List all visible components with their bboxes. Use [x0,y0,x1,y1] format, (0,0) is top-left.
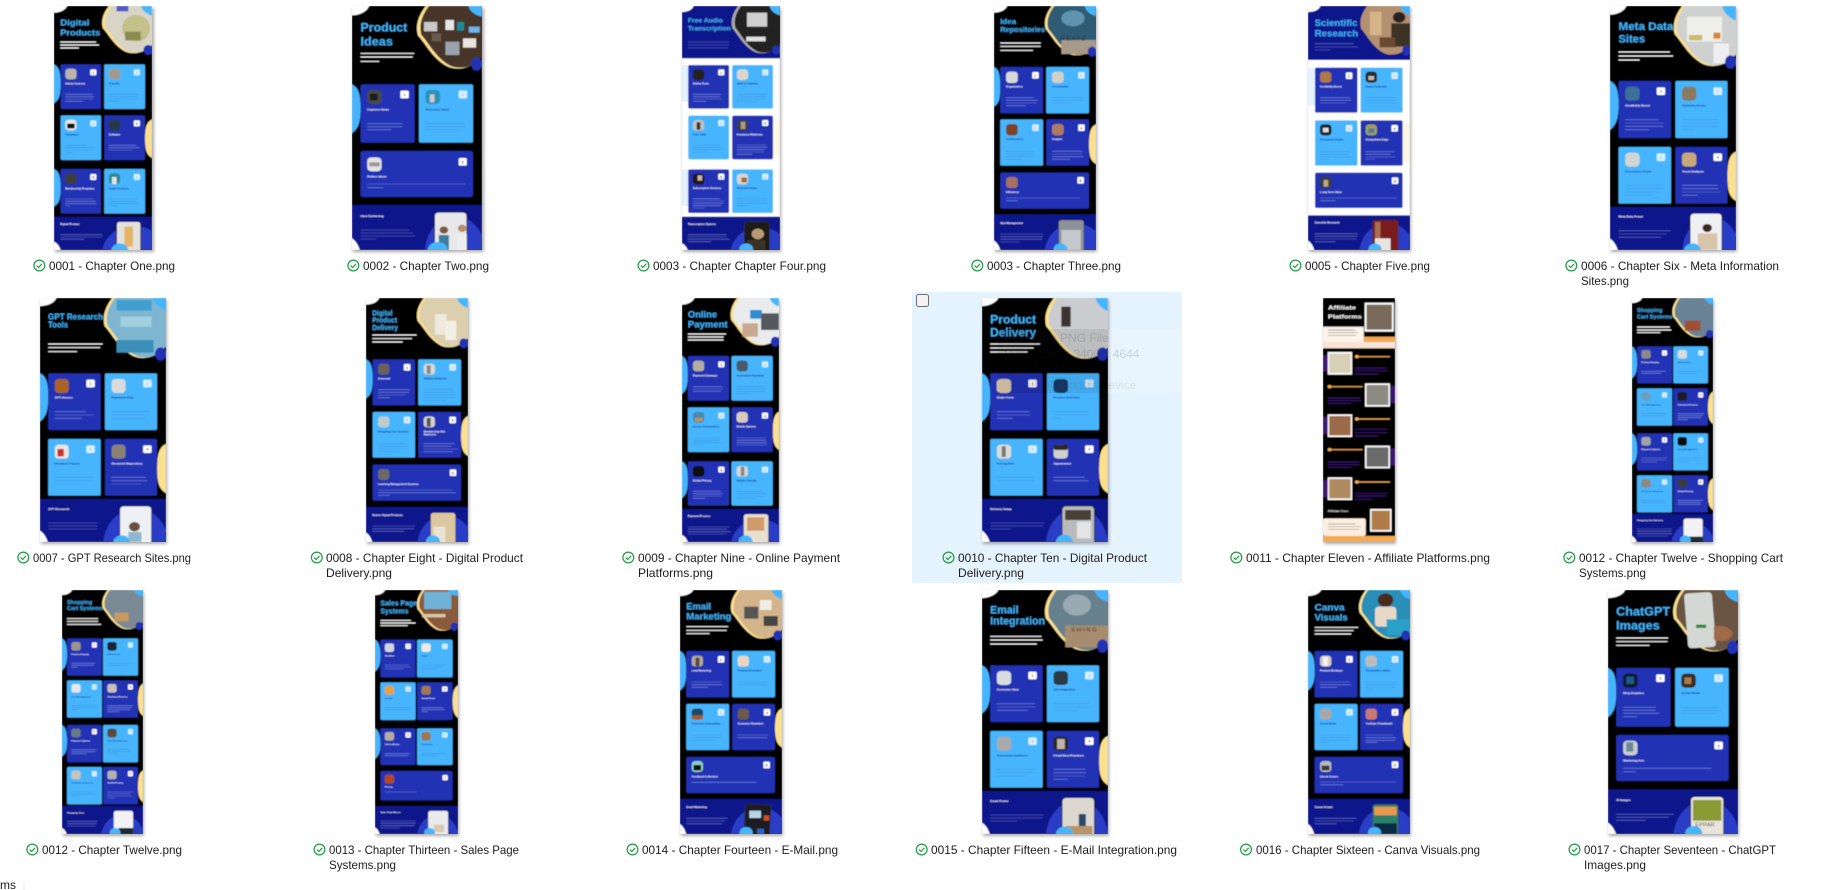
thumbnail: 0001 Digital Products: Digital [60,17,89,28]
thumbnail: 0010 Product Delivery: Product Selection [1054,396,1080,400]
thumbnail: 0010 Product Delivery: 4 [1088,448,1090,452]
status bar item count [0,878,24,890]
thumbnail: 0014 Email Marketing: Customer Retention [738,723,764,726]
thumbnail: 0001 Digital Products [54,6,152,250]
thumbnail: 0013 Sales Page Systems: Pricing [385,787,393,789]
thumbnail: 0003 Idea Repositories [994,6,1096,250]
thumbnail: 0009 Online Payment [682,298,779,542]
thumbnail: 0001 Digital Products: Digital Product [60,223,80,226]
thumbnail: 0001 Digital Products: Membership Programs [65,187,95,190]
thumbnail: 0009 Online Payment: Mobile Options [737,426,757,429]
thumbnail: 0013 Sales Page Systems: 5 [407,733,409,737]
thumbnail: 0014 Email Marketing: Product Promotion [738,670,763,673]
thumbnail: 0003 Free Audio Transcription: 1 [720,71,722,75]
thumbnail: 0016 Canva Visuals: Presentation Slides [1366,670,1391,673]
thumbnail: 0003 Free Audio Transcription: 3 [720,122,722,126]
thumbnail: 0010 Product Delivery: Pricing Plan [997,462,1015,465]
caption: 0006 [1566,259,1779,288]
thumbnail: 0003 Idea Repositories: 5 [1079,179,1082,183]
thumbnail: 0008 Digital Product Delivery: Affiliate Platforms [424,378,447,381]
thumbnail: 0002 Product Ideas: Idea Gathering [361,214,384,218]
thumbnail: 0008 Digital Product Delivery: 5 [452,472,454,475]
thumbnail: 0007 GPT Research Tools [40,298,166,542]
thumbnail: 0003 Idea Repositories: 2 [1080,74,1082,78]
thumbnail: 0001 Digital Products: Online Courses [65,83,86,86]
thumbnail: 0005 Scientific Research: Research [1315,29,1358,39]
thumbnail: 0014 Email Marketing: Lead Nurturing [692,670,712,673]
thumbnail: 0012 Shopping Cart Systems [1632,298,1713,542]
thumbnail: 0015 Email Integration: 2 [1088,674,1090,678]
thumbnail: 0012 Shopping Cart Systems: 7 [1663,480,1666,484]
caption: 0015: 0015 - Chapter Fifteen - E-Mail Integration.png [931,843,1177,857]
thumbnail: 0012 Shopping Cart Systems: 2 [1700,351,1702,355]
thumbnail: 0012 Shopping Cart Systems: 1 [1663,351,1666,355]
thumbnail: 0012 Chapter Twelve: Checkout Process [107,696,128,699]
thumbnail: 0016 Canva Visuals: Product Mockups [1320,670,1343,673]
thumbnail: 0014 Email Marketing: 5 [765,764,768,768]
caption: 0003 Chapter Four: 0003 - Chapter Chapter Four.png [653,259,826,273]
caption: 0003 Chapter Three: 0003 - Chapter Three.png [987,259,1121,273]
thumbnail: 0013 Sales Page Systems: Sales Page [380,599,418,607]
thumbnail: 0003 Free Audio Transcription: Online Tools [693,83,710,86]
thumbnail: 0017 ChatGPT Images [1608,590,1738,834]
thumbnail: 0012 Shopping Cart Systems: Shopping Cart Systems [1637,519,1664,522]
thumbnail: 0009 Online Payment: Payment Gateways [693,374,718,377]
thumbnail: 0014 Email Marketing [680,590,782,834]
thumbnail: 0013 Sales Page Systems: Headline [385,655,395,657]
thumbnail: 0011 Affiliate Platforms: Platforms [1328,315,1362,320]
thumbnail: 0009 Online Payment: Payment Process [688,515,711,518]
thumbnail: 0006 Meta Data Sites: Credibility Boost [1625,104,1650,108]
thumbnail: 0002 Product Ideas: Ideas [361,34,393,48]
thumbnail: 0007 GPT Research Tools: Statistical Data [112,396,134,400]
thumbnail: 0002 Product Ideas: 2 [462,93,464,97]
thumbnail: 0012 Shopping Cart Systems: Payment Options [1641,448,1661,451]
thumbnail: 0012 Shopping Cart Systems: User Management [1678,448,1698,451]
thumbnail: 0012 Chapter Twelve: 3 [93,685,95,689]
thumbnail: 0002 Product Ideas: Capture Ideas [367,108,389,111]
thumbnail: 0001 Digital Products: 1 [92,71,94,75]
caption: 0001: 0001 - Chapter One.png [49,259,175,273]
thumbnail: 0012 Chapter Twelve [62,590,143,834]
thumbnail: 0003 Idea Repositories: Efficiency [1006,191,1019,194]
thumbnail: 0003 Free Audio Transcription [682,6,780,250]
thumbnail: 0012 Shopping Cart Systems: Cart Systems [1637,315,1672,320]
thumbnail: 0017 ChatGPT Images: Marketing Ads [1623,759,1645,762]
thumbnail: 0016 Canva Visuals: 5 [1394,764,1396,767]
thumbnail: 0001 Digital Products: 6 [136,176,138,180]
caption: 0017: Images.png [1584,858,1646,872]
thumbnail: 0010 Product Delivery: Product [990,312,1037,326]
thumbnail: 0008 Digital Product Delivery: Learning Management Systems [378,483,419,486]
thumbnail: 0012 Chapter Twelve: Cart Systems [67,606,102,612]
thumbnail: 0006 Meta Data Sites: Meta Data Power [1619,215,1644,219]
thumbnail: 0012 Chapter Twelve: Customer Accounts [71,782,94,785]
thumbnail: 0012 Chapter Twelve: 6 [129,730,131,734]
thumbnail: 0006 Meta Data Sites: Trend Analysis [1682,170,1704,174]
thumbnail: 0013 Sales Page Systems: Social Proof [421,698,435,700]
thumbnail: 0006 Meta Data Sites: Persuasive Power [1625,170,1653,174]
thumbnail: 0005 Scientific Research [1308,6,1410,250]
thumbnail: 0003 Idea Repositories: Idea [1000,18,1017,26]
thumbnail: 0008 Digital Product Delivery: 4 [451,419,454,423]
caption: 0012 Chapter Twelve: 0012 - Chapter Twelve.png [42,843,182,857]
thumbnail: 0009 Online Payment: 3 [720,415,722,418]
thumbnail: 0002 Product Ideas: Product [361,21,408,34]
thumbnail: 0013 Sales Page Systems: 6 [444,733,446,737]
thumbnail: 0014 Email Marketing: Email Marketing [686,806,707,809]
thumbnail: 0013 Sales Page Systems: 2 [444,645,446,648]
thumbnail: 0012 Chapter Twelve: Product Display [71,653,90,656]
thumbnail: 0003 Free Audio Transcription: Transcription [688,24,731,33]
thumbnail: 0016 Canva Visuals: 4 [1394,711,1396,715]
thumbnail: 0008 Digital Product Delivery: Gumroad [378,378,391,381]
caption: 0016: 0016 - Chapter Sixteen - Canva Visuals.png [1256,843,1480,857]
ghost tooltip fading over 0010: Size: 1.62 MB [1004,362,1079,376]
thumbnail: 0009 Online Payment: 1 [720,363,722,367]
thumbnail: 0005 Scientific Research: Scientific Research [1315,222,1340,225]
caption: 0009 [623,551,841,580]
thumbnail: 0008 Digital Product Delivery: 2 [451,366,454,370]
ghost tooltip fading over 0010: Dimensions: 3400 x 4644 [1004,347,1140,361]
thumbnail: 0012 Shopping Cart Systems: Checkout Process [1678,404,1699,407]
thumbnail: 0005 Scientific Research: 2 [1393,75,1396,78]
thumbnail: 0010 Product Delivery [982,298,1108,542]
thumbnail: 0014 Email Marketing: 3 [720,711,722,715]
thumbnail: 0001 Digital Products: 3 [92,122,94,126]
thumbnail: 0012 Shopping Cart Systems: Add-to-Cart [1678,361,1691,364]
thumbnail: 0017 ChatGPT Images: 1 [1659,677,1661,681]
thumbnail: 0006 Meta Data Sites [1610,6,1736,250]
thumbnail: 0008 Digital Product Delivery: Digital [372,309,392,317]
caption: 0009: 0009 - Chapter Nine - Online Payment [638,551,841,565]
thumbnail: 0014 Email Marketing: Marketing [686,612,731,622]
thumbnail: 0013 Sales Page Systems: Visuals [385,698,394,700]
thumbnail: 0017 ChatGPT Images: Social Media [1681,691,1700,695]
thumbnail: 0003 Free Audio Transcription: 6 [764,176,766,179]
thumbnail: 0012 Shopping Cart Systems: 4 [1700,393,1702,397]
thumbnail: 0015 Email Integration: Customer Data [997,688,1019,692]
thumbnail: 0008 Digital Product Delivery: 1 [406,366,408,370]
thumbnail: 0015 Email Integration: Email Best Practices [1054,754,1084,757]
thumbnail: 0012 Chapter Twelve: 1 [93,643,95,647]
thumbnail: 0009 Online Payment: Mobile Friendly [737,480,757,483]
thumbnail: 0012 Shopping Cart Systems: Customer Accounts [1641,490,1664,493]
thumbnail: 0015 Email Integration: Integration [990,615,1045,627]
thumbnail: 0009 Online Payment: Global Pricing [693,480,712,483]
thumbnail: 0007 GPT Research Tools: 1 [89,382,92,386]
thumbnail: 0007 GPT Research Tools: Research Papers [55,462,80,465]
thumbnail: 0014 Email Marketing: 1 [720,658,722,662]
thumbnail: 0005 Scientific Research: 1 [1348,75,1350,78]
thumbnail: 0006 Meta Data Sites: 1 [1660,90,1662,94]
thumbnail: 0011 Affiliate Platforms: Affiliate Uses [1328,509,1348,513]
thumbnail: 0010 Product Delivery: 1 [1031,382,1034,386]
thumbnail: 0007 GPT Research Tools: GPT Research [48,507,70,511]
thumbnail: 0010 Product Delivery: 2 [1088,382,1090,386]
thumbnail: 0005 Scientific Research: Scientific [1315,19,1358,29]
thumbnail: 0003 Idea Repositories: Collaboration [1006,138,1024,141]
ghost tooltip fading over 0010 [998,329,1234,393]
thumbnail: 0016 Canva Visuals [1308,590,1410,834]
thumbnail: 0006 Meta Data Sites: 2 [1717,90,1719,94]
caption: 0006: Sites.png [1581,274,1629,288]
thumbnail: 0008 Digital Product Delivery: Product [372,316,397,324]
thumbnail: 0003 Idea Repositories: Idea Management [1000,222,1023,225]
thumbnail: 0007 GPT Research Tools: Research Repository [112,462,143,465]
thumbnail: 0013 Sales Page Systems: Sales Page Basics [380,812,402,814]
thumbnail: 0012 Chapter Twelve: Global Pricing [107,783,124,785]
thumbnail: 0005 Scientific Research: 5 [1394,180,1396,183]
caption: 0012 Shopping Cart Systems: 0012 - Chapter Twelve - Shopping Cart [1579,551,1784,565]
thumbnail: 0003 Free Audio Transcription: Real-time Notes [737,187,758,190]
thumbnail: 0009 Online Payment: 2 [764,363,766,367]
thumbnail: 0003 Idea Repositories: 3 [1034,127,1036,130]
thumbnail: 0016 Canva Visuals: Canva [1315,603,1345,613]
selection checkbox [916,294,928,306]
thumbnail: 0003 Free Audio Transcription: Subscription Services [693,187,722,190]
thumbnail: 0014 Email Marketing: 4 [766,711,768,715]
caption: 0010: Delivery.png [958,566,1024,580]
thumbnail: 0007 GPT Research Tools: Tools [48,319,68,330]
thumbnail: 0013 Sales Page Systems: 4 [444,687,446,691]
thumbnail: 0016 Canva Visuals: Ebook Covers [1320,775,1339,778]
caption: 0013: 0013 - Chapter Thirteen - Sales Page [329,843,519,857]
thumbnail: 0003 Idea Repositories: Repositories [1000,26,1046,34]
thumbnail: 0012 Shopping Cart Systems: 3 [1663,393,1666,397]
thumbnail: 0016 Canva Visuals: YouTube Thumbnails [1366,723,1393,726]
caption: 0013 [314,843,519,872]
thumbnail: 0008 Digital Product Delivery: Shopping Cart Systems [378,430,409,433]
thumbnail: 0013 Sales Page Systems: Guarantee [421,743,434,746]
thumbnail: 0015 Email Integration: API Integration [1054,688,1076,692]
thumbnail: 0012 Chapter Twelve: User Management [107,740,128,743]
thumbnail: 0016 Canva Visuals: Visuals [1315,613,1348,623]
thumbnail: 0002 Product Ideas [352,6,482,250]
thumbnail: 0003 Free Audio Transcription: Built-in Features [737,83,759,86]
thumbnail: 0001 Digital Products: Templates [65,134,79,137]
thumbnail: 0012 Chapter Twelve: Cart Management [71,696,91,699]
thumbnail: 0010 Product Delivery: 3 [1031,448,1034,452]
thumbnail: 0006 Meta Data Sites: Sites [1619,34,1645,45]
thumbnail: 0002 Product Ideas: Refine Ideas [367,175,387,178]
thumbnail: 0009 Online Payment: Automated Payments [737,374,765,377]
thumbnail: 0003 Free Audio Transcription: Transcription Options [688,223,717,226]
thumbnail: 0015 Email Integration: Email Power [990,799,1009,803]
thumbnail: 0012 Shopping Cart Systems: Product Display [1641,361,1660,364]
thumbnail: 0017 ChatGPT Images: AI Images [1616,798,1631,802]
thumbnail: 0017 ChatGPT Images: EPPAR [1695,823,1715,829]
thumbnail: 0001 Digital Products: Audio Products [109,187,130,190]
thumbnail: 0015 Email Integration: SHING [1071,628,1099,634]
thumbnail: 0013 Sales Page Systems: Copy [421,655,428,657]
caption: 0017 [1569,843,1777,872]
thumbnail: 0005 Scientific Research: Competitive Edge [1366,138,1389,141]
thumbnail: 0013 Sales Page Systems: 1 [407,645,409,648]
thumbnail: 0003 Free Audio Transcription: Freelance Platforms [737,133,763,136]
thumbnail: 0012 Chapter Twelve: Shopping [67,600,93,606]
thumbnail: 0009 Online Payment: Online [688,310,717,320]
thumbnail: 0017 ChatGPT Images: 2 [1718,677,1720,681]
caption: 0017: 0017 - Chapter Seventeen - ChatGPT [1584,843,1777,857]
thumbnail: 0008 Digital Product Delivery: Deliver Digital Products [372,514,403,517]
thumbnail: 0011 Affiliate Platforms [1323,298,1395,542]
thumbnail: 0003 Idea Repositories: REATE [1061,37,1087,43]
thumbnail: 0015 Email Integration: Automated Additions [997,754,1028,757]
thumbnail: 0012 Shopping Cart Systems: 6 [1700,438,1702,442]
thumbnail: 0014 Email Marketing: Customer Onboarding [692,723,721,726]
thumbnail: 0003 Free Audio Transcription: 5 [720,176,722,179]
thumbnail: 0017 ChatGPT Images: Images [1616,618,1660,632]
thumbnail: 0009 Online Payment: 6 [764,469,766,472]
thumbnail: 0012 Shopping Cart Systems: Cart Management [1641,404,1661,407]
thumbnail: 0005 Scientific Research: Long-Term Value [1320,191,1342,194]
thumbnail: 0016 Canva Visuals: Social Media [1320,723,1337,726]
caption: 0005: 0005 - Chapter Five.png [1305,259,1430,273]
thumbnail: 0002 Product Ideas: Structure Ideas [426,108,450,111]
thumbnail: 0015 Email Integration: 1 [1031,674,1034,678]
thumbnail: 0013 Sales Page Systems: Systems [380,607,409,615]
caption: 0011: 0011 - Chapter Eleven - Affiliate Platforms.png [1246,551,1490,565]
caption: 0013: Systems.png [329,858,396,872]
thumbnail: 0012 Chapter Twelve: 4 [129,685,131,689]
thumbnail: 0008 Digital Product Delivery: Membership Site [424,430,446,433]
caption: 0007: 0007 - GPT Research Sites.png [33,551,191,565]
thumbnail: 0001 Digital Products: Products [60,27,100,38]
thumbnail: 0014 Email Marketing: Email [686,602,711,612]
thumbnail: 0002 Product Ideas: 3 [461,161,464,164]
thumbnail: 0015 Email Integration: 3 [1031,740,1034,744]
thumbnail: 0007 GPT Research Tools: 3 [89,448,92,452]
thumbnail: 0014 Email Marketing: 2 [766,658,768,662]
thumbnail: 0008 Digital Product Delivery [366,298,468,542]
thumbnail: 0015 Email Integration: 4 [1088,740,1090,744]
thumbnail: 0012 Chapter Twelve: 5 [93,730,95,734]
caption: 0012 Shopping Cart Systems [1564,551,1784,580]
thumbnail: 0015 Email Integration [982,590,1108,834]
thumbnail: 0016 Canva Visuals: 2 [1394,658,1396,662]
thumbnail: 0005 Scientific Research: Credibility Boost [1320,86,1342,89]
thumbnail: 0003 Idea Repositories: 4 [1080,127,1082,130]
thumbnail: 0012 Shopping Cart Systems: Shopping [1637,308,1663,314]
thumbnail: 0010 Product Delivery: Order Form [997,396,1014,400]
thumbnail: 0001 Digital Products: E-books [109,83,120,86]
thumbnail: 0005 Scientific Research: Persuasive Power [1320,138,1343,141]
thumbnail: 0016 Canva Visuals: 1 [1348,658,1350,662]
thumbnail: 0006 Meta Data Sites: 4 [1717,156,1719,160]
caption: 0008: Delivery.png [326,566,392,580]
thumbnail: 0012 Chapter Twelve: 2 [129,643,131,647]
thumbnail: 0008 Digital Product Delivery: Delivery [372,324,398,332]
thumbnail: 0005 Scientific Research: 3 [1348,127,1350,131]
thumbnail: 0013 Sales Page Systems: Call to Action [385,743,400,746]
selected item highlight [912,292,1182,583]
thumbnail: 0003 Free Audio Transcription: Free Audio [688,16,723,25]
thumbnail: 0009 Online Payment: 5 [720,469,722,472]
thumbnail: 0012 Shopping Cart Systems: 8 [1700,480,1702,484]
thumbnail: 0003 Free Audio Transcription: Free Trials [693,133,707,136]
thumbnail: 0011 Affiliate Platforms: Affiliate [1328,306,1356,311]
thumbnail: 0005 Scientific Research: 4 [1393,127,1396,131]
thumbnail: 0003 Free Audio Transcription: 2 [764,71,766,75]
thumbnail: 0006 Meta Data Sites: Meta Data [1619,22,1674,33]
thumbnail: 0009 Online Payment: Payment [688,320,728,330]
thumbnail: 0012 Chapter Twelve: Add-to-Cart [107,653,120,656]
thumbnail: 0002 Product Ideas: 1 [403,93,406,97]
thumbnail: 0010 Product Delivery: Delivery [990,326,1037,339]
thumbnail: 0007 GPT Research Tools: GPT Research [48,311,103,321]
thumbnail: 0008 Digital Product Delivery: 3 [406,419,408,423]
thumbnail: 0003 Idea Repositories: Insights [1052,138,1063,141]
ghost tooltip fading over 0010: Available on this device [1011,378,1137,392]
ghost tooltip fading over 0010: Item type: PNG File [1004,331,1109,345]
thumbnail: 0007 GPT Research Tools: 4 [146,448,148,452]
thumbnail: 0006 Meta Data Sites: 3 [1660,156,1662,160]
thumbnail: 0017 ChatGPT Images: ChatGPT [1616,604,1670,618]
thumbnail: 0010 Product Delivery: Appearance [1054,462,1072,465]
thumbnail: 0008 Digital Product Delivery: Platforms [424,433,437,436]
thumbnail: 0013 Sales Page Systems: 3 [407,687,409,691]
thumbnail: 0012 Shopping Cart Systems: 5 [1663,438,1666,442]
thumbnail: 0014 Email Marketing: Feedback Collection [692,775,718,778]
thumbnail: 0012 Shopping Cart Systems: Global Pricing [1678,491,1694,493]
thumbnail: 0012 Chapter Twelve: Shopping Carts [67,811,85,814]
thumbnail: 0016 Canva Visuals: Canva Visuals [1315,806,1334,809]
thumbnail: 0010 Product Delivery: Delivery Setup [990,507,1012,511]
thumbnail: 0012 Chapter Twelve: 8 [129,772,131,776]
thumbnail: 0001 Digital Products: Software [109,134,121,137]
caption: 0008 [311,551,524,580]
thumbnail: 0007 GPT Research Tools: GPT Access [55,396,73,400]
thumbnail: 0001 Digital Products: 2 [136,71,138,75]
thumbnail: 0005 Scientific Research: Expert Authority [1366,86,1387,89]
thumbnail: 0003 Free Audio Transcription: 4 [764,122,766,126]
caption: 0006: 0006 - Chapter Six - Meta Information [1581,259,1779,273]
thumbnail: 0013 Sales Page Systems [375,590,458,834]
thumbnail: 0013 Sales Page Systems: 7 [444,776,446,780]
thumbnail: 0007 GPT Research Tools: 2 [146,382,148,386]
thumbnail: 0012 Chapter Twelve: Payment Options [71,740,91,743]
caption: 0014: 0014 - Chapter Fourteen - E-Mail.png [642,843,838,857]
thumbnail: 0003 Idea Repositories: Accessibility [1052,86,1069,89]
thumbnail: 0017 ChatGPT Images: Blog Graphics [1623,691,1645,695]
caption: 0010: 0010 - Chapter Ten - Digital Product [958,551,1148,565]
caption: 0009: Platforms.png [638,566,713,580]
thumbnail: 0012 Chapter Twelve: 7 [93,772,95,776]
thumbnail: 0017 ChatGPT Images: 3 [1718,745,1720,748]
thumbnail: 0001 Digital Products: 4 [136,122,138,126]
thumbnail: 0016 Canva Visuals: 3 [1348,711,1350,715]
thumbnail: 0003 Idea Repositories: 1 [1034,74,1036,78]
thumbnail: 0003 Idea Repositories: Organization [1006,86,1023,89]
caption: 0008: 0008 - Chapter Eight - Digital Product [326,551,524,565]
thumbnail: 0009 Online Payment: 4 [764,415,766,418]
thumbnail: 0001 Digital Products: 5 [92,176,94,180]
thumbnail: 0006 Meta Data Sites: Authority Boost [1682,104,1705,108]
thumbnail: 0015 Email Integration: Email [990,603,1019,616]
thumbnail: 0009 Online Payment: Secure Transactions [693,426,720,429]
caption: 0002: 0002 - Chapter Two.png [363,259,489,273]
caption: 0010 [943,551,1148,580]
caption: 0012 Shopping Cart Systems: Systems.png [1579,566,1646,580]
